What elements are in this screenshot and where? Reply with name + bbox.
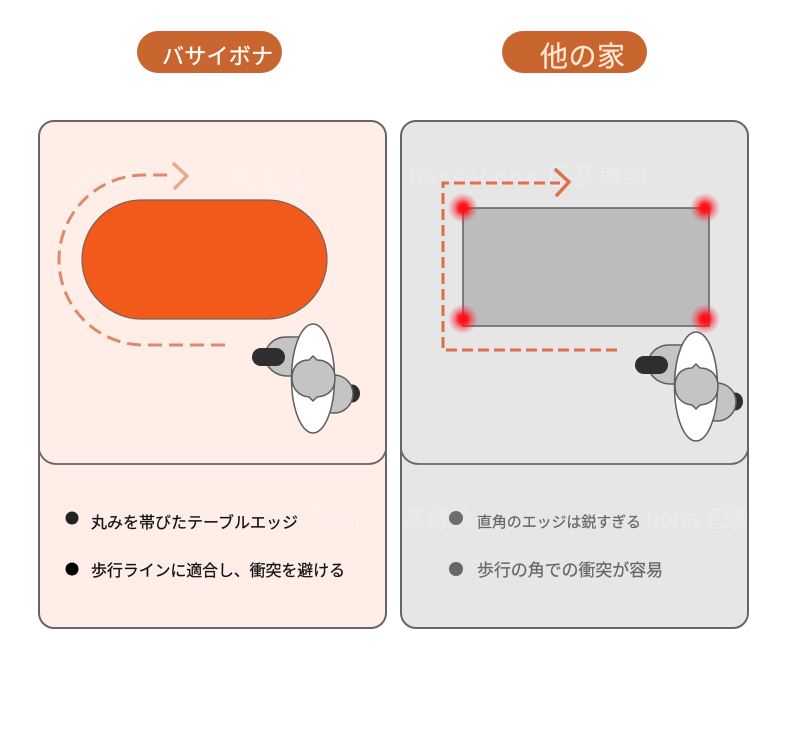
- heading pill: other brands: [502, 31, 647, 73]
- watermark: lower centre: 赛博纳: [401, 506, 473, 533]
- heading pill: Bassaibona: バサイボナ: [162, 44, 273, 69]
- panel background: [401, 121, 748, 628]
- bullet 1: [66, 512, 78, 524]
- arrow head: [556, 170, 569, 195]
- panel outer border: [401, 121, 748, 628]
- text: fits walking line: 歩行ラインに適合し、衝突を避ける: [91, 562, 345, 580]
- panel outer border: [39, 121, 386, 628]
- icon: person walking: [635, 332, 743, 441]
- red corner glows: [448, 193, 720, 334]
- panel background: [39, 121, 386, 628]
- square grey table: [463, 208, 709, 326]
- watermark: lower right: bona 巴赛: [646, 506, 754, 533]
- heading pill: Bassaibona: [137, 31, 282, 73]
- bullet 1: [449, 511, 463, 525]
- rounded orange table: [82, 200, 327, 319]
- panel: other brands square table: [401, 121, 754, 628]
- text: right-angle edge: 直角のエッジは鋭すぎる: [477, 514, 641, 531]
- panel: Bassaibona rounded table: [39, 121, 471, 628]
- icon: person walking: [252, 324, 360, 433]
- illustration divider: [401, 450, 748, 464]
- bullet 2: [449, 562, 463, 576]
- text: rounded edge: 丸みを帯びたテーブルエッジ: [91, 513, 298, 532]
- dashed walking path around the table: [59, 175, 225, 345]
- watermark: lower left: bona 巴赛博纳: [315, 506, 471, 533]
- watermark: upper right: bassabona 巴赛博纳: [409, 164, 647, 191]
- illustration divider: [39, 450, 386, 464]
- dashed walking path around the corner: [443, 183, 617, 350]
- watermark: upper left: bassabona 巴赛博纳: [65, 165, 305, 192]
- arrow head: [174, 164, 187, 188]
- bullet 2: [66, 562, 78, 576]
- text: easy collision: 歩行の角での衝突が容易: [477, 561, 663, 580]
- heading pill: other brands: 他の家: [540, 41, 625, 72]
